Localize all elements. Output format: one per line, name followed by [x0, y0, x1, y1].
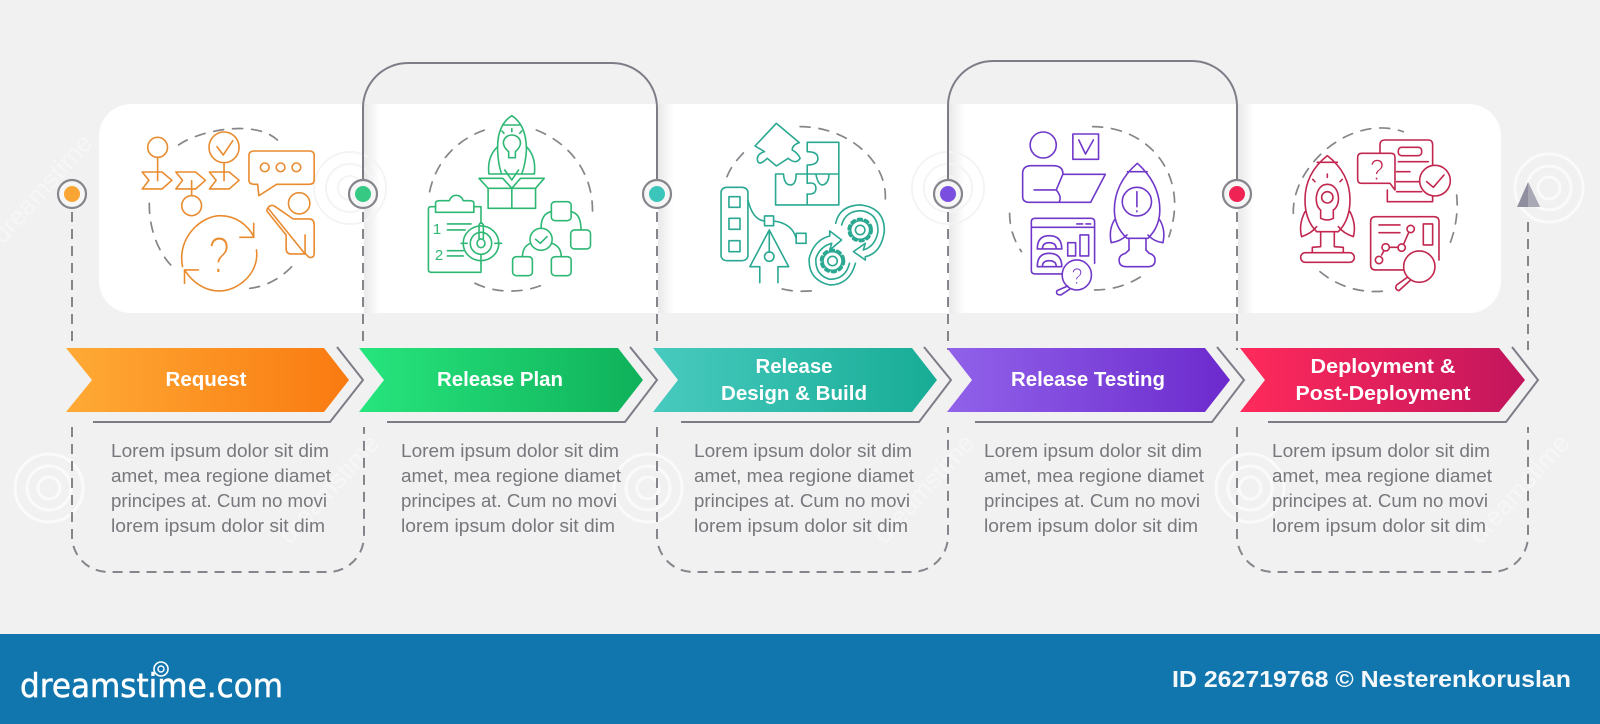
- marker dot 5: [1223, 180, 1251, 208]
- text block: request: [111, 440, 331, 536]
- icon: release plan: [428, 116, 593, 291]
- icon: request: [142, 129, 314, 291]
- connector: dashed verticals above arrows: [72, 212, 1528, 350]
- footer bar: [0, 634, 1600, 724]
- text block: release testing: Lorem ipsum dolor sit dim: [984, 440, 1202, 461]
- marker dot 1: [58, 180, 86, 208]
- text block: release design and build: amet, mea regione diamet: [694, 465, 914, 486]
- icon: request: ?: [208, 225, 230, 284]
- heading: deployment: [1296, 356, 1471, 405]
- end arrowhead: [1517, 182, 1540, 207]
- marker dot 4: [934, 180, 962, 208]
- text block: request: Lorem ipsum dolor sit dim: [111, 440, 329, 461]
- text block: deployment: principes at. Cum no movi: [1272, 490, 1488, 511]
- text: dreamstime: [1462, 428, 1575, 549]
- panel: white icon band: [99, 104, 1501, 313]
- arrow: release design and build: [653, 348, 937, 412]
- text block: deployment: lorem ipsum dolor sit dim: [1272, 515, 1486, 536]
- text block: release design and build: principes at. Cum no movi: [694, 490, 910, 511]
- connector: solid arch over step 4: [948, 61, 1237, 194]
- text block: deployment: [1272, 440, 1492, 536]
- text block: release testing: amet, mea regione diamet: [984, 465, 1204, 486]
- text block: release testing: principes at. Cum no movi: [984, 490, 1200, 511]
- connector: solid arch over step 2: [363, 63, 657, 194]
- text block: deployment: Lorem ipsum dolor sit dim: [1272, 440, 1490, 461]
- text block: release design and build: [694, 440, 914, 536]
- text block: request: amet, mea regione diamet: [111, 465, 331, 486]
- text block: release testing: [984, 440, 1204, 536]
- text block: release design and build: lorem ipsum dolor sit dim: [694, 515, 908, 536]
- text block: release plan: principes at. Cum no movi: [401, 490, 617, 511]
- arrow outline: release design and build: [681, 347, 951, 422]
- arrow outline: release plan: [387, 347, 657, 422]
- footer credit: ID 262719768 © Nesterenkoruslan: [1172, 666, 1571, 692]
- heading: deployment: Post-Deployment: [1296, 383, 1471, 405]
- arrow outline: request: [93, 347, 363, 422]
- heading: release testing: Release Testing: [1011, 369, 1165, 391]
- heading: release plan: Release Plan: [437, 369, 563, 391]
- text block: release testing: lorem ipsum dolor sit dim: [984, 515, 1198, 536]
- arrow: request: [66, 348, 349, 412]
- marker dot 3: [643, 180, 671, 208]
- arrow outline: release testing: [975, 347, 1244, 422]
- text block: deployment: amet, mea regione diamet: [1272, 465, 1492, 486]
- marker dot 2: [349, 180, 377, 208]
- text block: release plan: amet, mea regione diamet: [401, 465, 621, 486]
- heading: deployment: Deployment &: [1310, 356, 1456, 378]
- heading: release design and build: Release: [756, 356, 832, 378]
- icon: release testing: ?: [1072, 264, 1083, 289]
- text block: release design and build: Lorem ipsum dolor sit dim: [694, 440, 912, 461]
- heading: release design and build: Design & Build: [721, 383, 867, 405]
- text block: request: principes at. Cum no movi: [111, 490, 327, 511]
- footer logo: dreamstime.com: [20, 666, 283, 705]
- text block: request: lorem ipsum dolor sit dim: [111, 515, 325, 536]
- text block: release plan: [401, 440, 621, 536]
- text block: release plan: lorem ipsum dolor sit dim: [401, 515, 615, 536]
- icon: release plan: 2: [435, 247, 443, 264]
- heading: request: Request: [166, 369, 247, 391]
- icon: deployment and post-deployment: [1293, 128, 1457, 292]
- icon: deployment and post-deployment: ?: [1370, 153, 1384, 186]
- connector: dashed loops below arrows: [72, 427, 1528, 572]
- arrow: release plan: [359, 348, 643, 412]
- arrow: deployment: [1240, 348, 1525, 412]
- heading: release design and build: [721, 356, 867, 405]
- icon: release plan: 1: [433, 221, 441, 238]
- arrow outline: deployment: [1268, 347, 1538, 422]
- icon: release design and build: [721, 123, 885, 291]
- arrow: release testing: [947, 348, 1230, 412]
- text block: release plan: Lorem ipsum dolor sit dim: [401, 440, 619, 461]
- text: dreamstime: [272, 428, 385, 549]
- text: dreamstime: [867, 428, 980, 549]
- icon: release testing: [1010, 127, 1175, 295]
